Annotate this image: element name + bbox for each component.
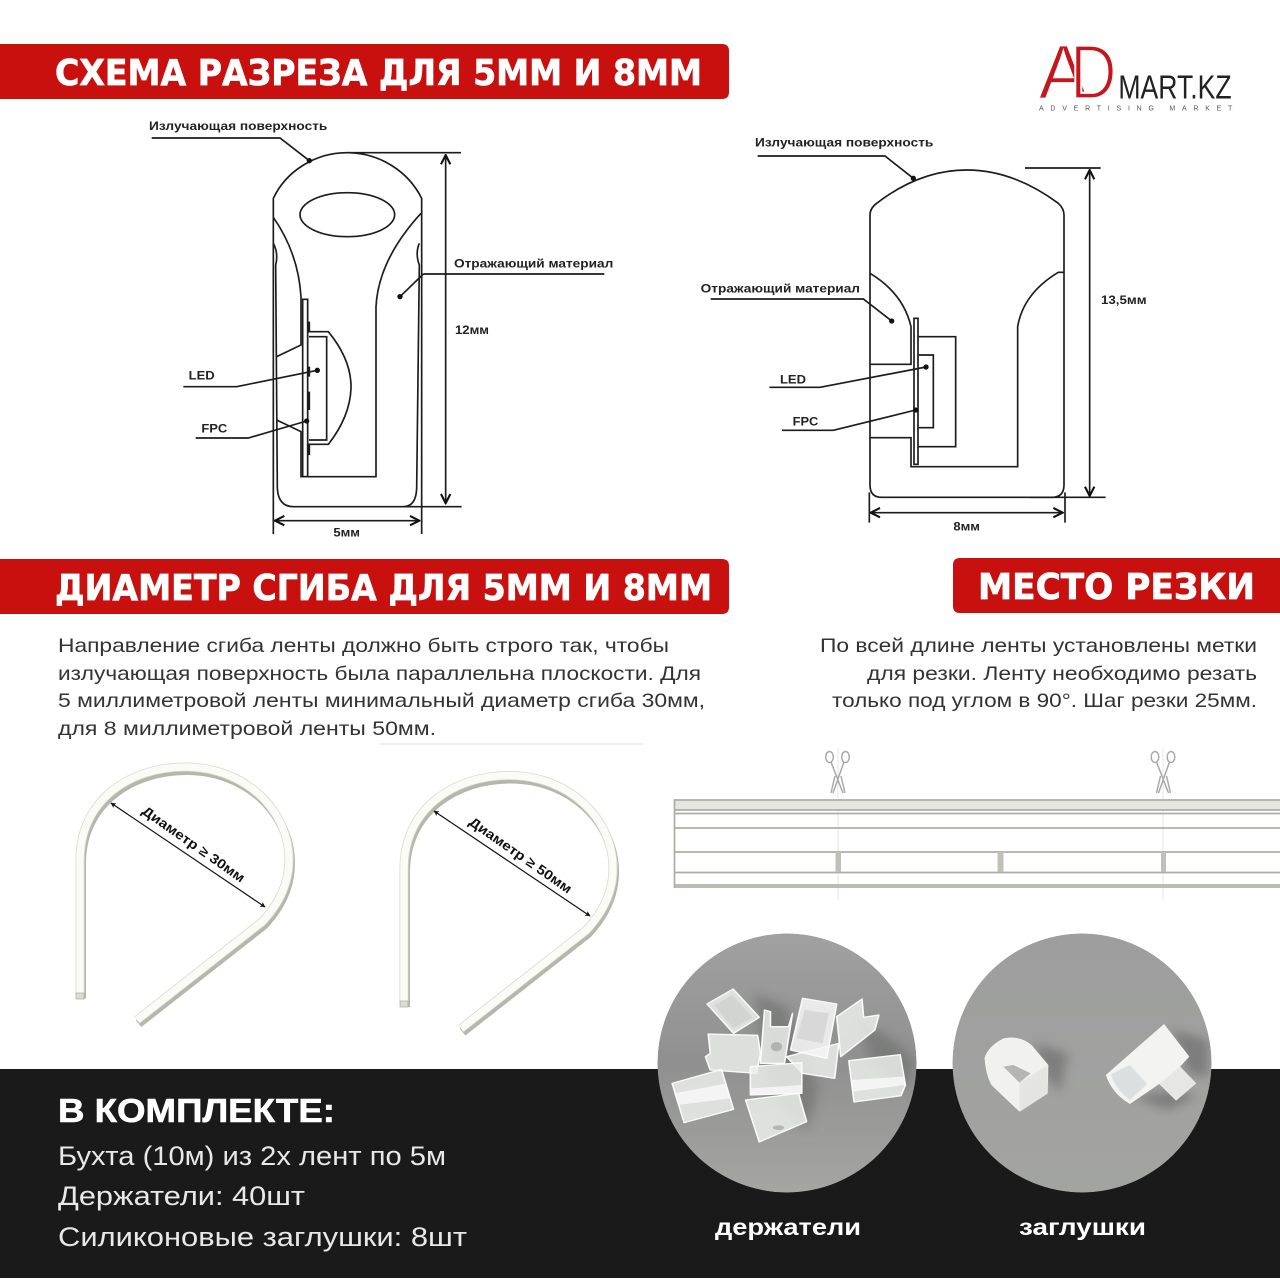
heading: bend diameter <box>0 559 729 614</box>
text block: bending instructions: для 8 миллиметровой ленты 50мм. <box>58 718 436 740</box>
diagram: 5mm cross-section <box>149 119 613 540</box>
diagram: 8mm cross-section: Излучающая поверхность <box>755 136 933 150</box>
diagram: 5mm cross-section: Излучающая поверхность <box>149 119 327 133</box>
shadows <box>1036 1030 1208 1110</box>
diagram: 8mm cross-section <box>701 136 1147 534</box>
diagram: 5mm cross-section: FPC <box>201 422 228 436</box>
shadows <box>754 993 915 1130</box>
icon: scissors left <box>826 752 849 793</box>
illustration: bent strip 30mm <box>76 767 290 1024</box>
panel: kit contents background <box>0 1069 1280 1278</box>
diagram: 5mm cross-section: LED <box>189 368 215 382</box>
diagram: 5mm cross-section: Отражающий материал <box>454 256 613 270</box>
text block: kit contents: В КОМПЛЕКТЕ: <box>58 1092 335 1129</box>
text block: kit contents <box>58 1092 467 1252</box>
text block: kit contents: Держатели: 40шт <box>58 1181 305 1211</box>
photo: holders <box>658 934 916 1192</box>
illustration: strip with cut marks <box>674 748 1280 900</box>
logo: ADMART.KZ: D <box>1070 29 1117 115</box>
heading: bend diameter: ДИАМЕТР СГИБА ДЛЯ 5ММ И 8ММ <box>55 568 712 609</box>
text block: cutting instructions: только под углом в 90°. Шаг резки 25мм. <box>832 690 1257 712</box>
diagram: 8mm cross-section: Отражающий материал <box>701 282 860 296</box>
holder pieces <box>672 989 905 1142</box>
icon: scissors right <box>1151 752 1175 793</box>
text block: cutting instructions: По всей длине ленты установлены метки <box>820 635 1257 657</box>
profile outline 5mm <box>273 153 462 534</box>
logo: ADMART.KZ <box>1039 29 1233 115</box>
text block: bending instructions: излучающая поверхность была параллельна плоскости. Для <box>58 663 701 685</box>
diagram: 5mm cross-section: 12мм <box>455 323 489 337</box>
photo: end caps <box>952 934 1212 1192</box>
text block: kit contents: Силиконовые заглушки: 8шт <box>58 1222 467 1252</box>
heading: cross-section scheme: СХЕМА РАЗРЕЗА ДЛЯ 5ММ И 8ММ <box>55 53 702 94</box>
callout leaders 8mm <box>711 156 1106 523</box>
heading: cutting place: МЕСТО РЕЗКИ <box>978 567 1255 608</box>
arrow: diameter 50mm <box>434 811 590 916</box>
logo: ADMART.KZ: A <box>1039 29 1088 115</box>
diagram: 5mm cross-section: 5мм <box>333 526 360 540</box>
arrow: diameter 30mm <box>111 803 265 907</box>
text block: bending instructions: 5 миллиметровой ленты минимальный диаметр сгиба 30мм, <box>58 690 705 712</box>
illustration: bent strip 50mm: Диаметр ≥ 50мм <box>466 814 575 896</box>
logo: ADMART.KZ: ADVERTISING MARKET <box>1039 105 1233 112</box>
profile outline 8mm <box>870 170 1064 497</box>
illustration: bent strip 30mm: Диаметр ≥ 30мм <box>139 803 248 885</box>
logo: ADMART.KZ: MART.KZ <box>1118 69 1232 106</box>
diagram: 8mm cross-section: FPC <box>793 415 819 429</box>
heading: cutting place <box>953 558 1280 613</box>
callout leaders 5mm <box>152 138 604 521</box>
heading: cross-section scheme <box>0 44 729 99</box>
end cap 1 <box>985 1037 1048 1112</box>
text block: cutting instructions: для резки. Ленту необходимо резать <box>867 663 1257 685</box>
end cap 2 <box>1106 1024 1196 1104</box>
text block: bending instructions: Направление сгиба ленты должно быть строго так, чтобы <box>58 635 669 657</box>
text block: cutting instructions <box>820 635 1257 712</box>
diagram: 8mm cross-section: LED <box>780 372 806 386</box>
diagram: 8mm cross-section: 13,5мм <box>1101 293 1147 307</box>
caption: holders: держатели <box>715 1214 861 1240</box>
illustration: bent strip 50mm <box>400 776 614 1032</box>
diagram: 8mm cross-section: 8мм <box>953 520 980 534</box>
caption: end caps: заглушки <box>1019 1214 1146 1240</box>
text block: bending instructions <box>58 635 705 740</box>
text block: kit contents: Бухта (10м) из 2х лент по 5м <box>58 1141 446 1171</box>
